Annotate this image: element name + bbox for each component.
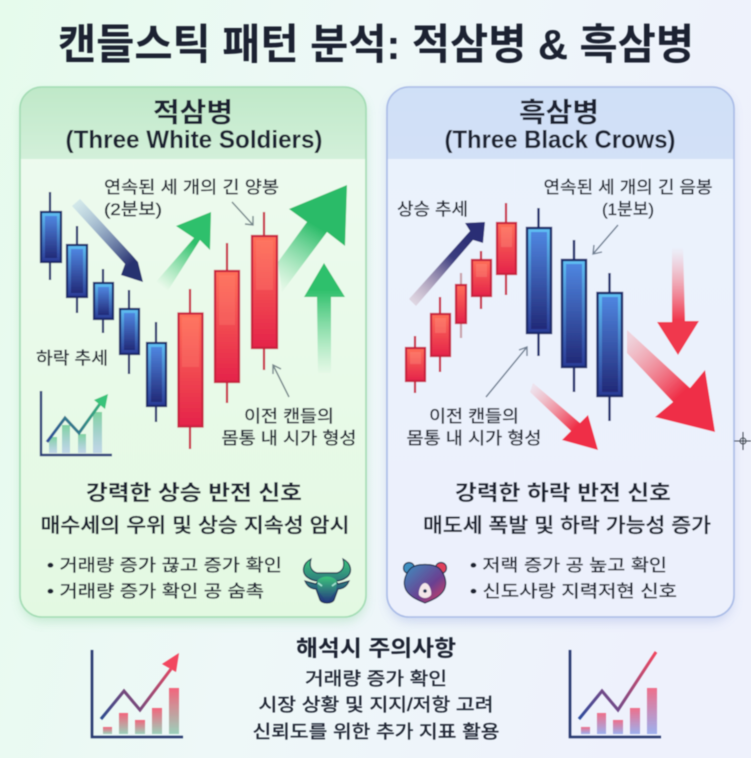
panel heading: (Three Black Crows) <box>444 126 676 154</box>
pointer arrow to candle <box>593 225 618 254</box>
panel: three white soldiers <box>20 87 366 622</box>
label: open within prior body: 몸통 내 시가 형성 <box>222 429 356 448</box>
panel: three black crows <box>387 87 734 622</box>
cautions text: 거래량 증가 확인 <box>305 669 447 689</box>
label: three long white candles: 연속된 세 개의 긴 양봉 <box>104 178 279 197</box>
panel heading: 적삼병 <box>153 98 233 128</box>
signal summary: 매도세 폭발 및 하락 가능성 증가 <box>423 514 711 537</box>
label: open within prior body: 이전 캔들의 <box>429 407 519 426</box>
label: open within prior body <box>406 407 542 448</box>
icon: right chart <box>570 650 661 737</box>
signal summary: 강력한 하락 반전 신호 <box>455 482 671 505</box>
bullet list: • 거래량 증가 확인 공 숨촉 <box>47 582 264 601</box>
bullet list: • 거래량 증가 끊고 증가 확인 <box>47 556 282 575</box>
signal summary: 강력한 상승 반전 신호 <box>86 482 302 505</box>
panel heading: 흑삼병 <box>519 98 599 128</box>
uptrend candles <box>406 203 516 393</box>
arrow: red down large <box>627 330 715 432</box>
icon: bear <box>404 562 446 603</box>
label: open within prior body: 이전 캔들의 <box>244 407 334 426</box>
arrow: downtrend <box>72 199 143 282</box>
label: downtrend: 하락 추세 <box>36 349 108 368</box>
panel heading: (Three White Soldiers) <box>66 126 322 154</box>
three black crows candles <box>527 208 622 421</box>
label: open within prior body <box>222 407 356 448</box>
icon: left chart <box>92 650 183 737</box>
downtrend candles <box>41 192 166 422</box>
bullet list: • 신도사랑 지력저현 신호 <box>470 582 677 601</box>
bullet list <box>47 556 282 601</box>
arrow: green up small <box>155 212 211 292</box>
bullet list: • 저랙 증가 공 높고 확인 <box>470 556 667 575</box>
icon: mini growth chart <box>41 391 112 455</box>
bullet list <box>470 556 677 601</box>
label: uptrend: 상승 추세 <box>397 200 468 219</box>
arrow: red down vertical <box>657 247 699 355</box>
pointer arrow to open <box>273 365 289 397</box>
label: three long black candles: 연속된 세 개의 긴 음봉 <box>544 178 712 197</box>
label: three long black candles: (1분보) <box>602 200 654 219</box>
title: 캔들스틱 패턴 분석: 적삼병 & 흑삼병 <box>58 21 694 68</box>
panel heading <box>444 98 676 154</box>
label: open within prior body: 몸통 내 시가 형성 <box>406 429 542 448</box>
cautions text: 신뢰도를 위한 추가 지표 활용 <box>252 722 500 742</box>
icon: bull <box>304 559 350 603</box>
cautions text <box>252 636 500 742</box>
signal summary: 매수세의 우위 및 상승 지속성 암시 <box>40 514 350 537</box>
label: three long white candles <box>104 178 279 219</box>
pointer arrow to open <box>486 347 527 397</box>
icon: crosshair cursor <box>734 432 751 450</box>
arrow: green up vertical <box>304 263 345 373</box>
arrow: uptrend <box>409 222 485 306</box>
signal summary <box>423 482 711 537</box>
label: three long black candles <box>544 178 712 219</box>
arrow: red down small <box>530 383 598 450</box>
cautions text: 해석시 주의사항 <box>296 636 456 661</box>
pointer arrow to candle <box>232 202 253 225</box>
arrow: green up large <box>278 185 347 292</box>
cautions text: 시장 상황 및 지지/저항 고려 <box>258 695 494 715</box>
three white soldiers candles <box>178 212 277 449</box>
panel heading <box>66 98 322 154</box>
label: three long white candles: (2분보) <box>104 200 162 219</box>
signal summary <box>40 482 350 537</box>
